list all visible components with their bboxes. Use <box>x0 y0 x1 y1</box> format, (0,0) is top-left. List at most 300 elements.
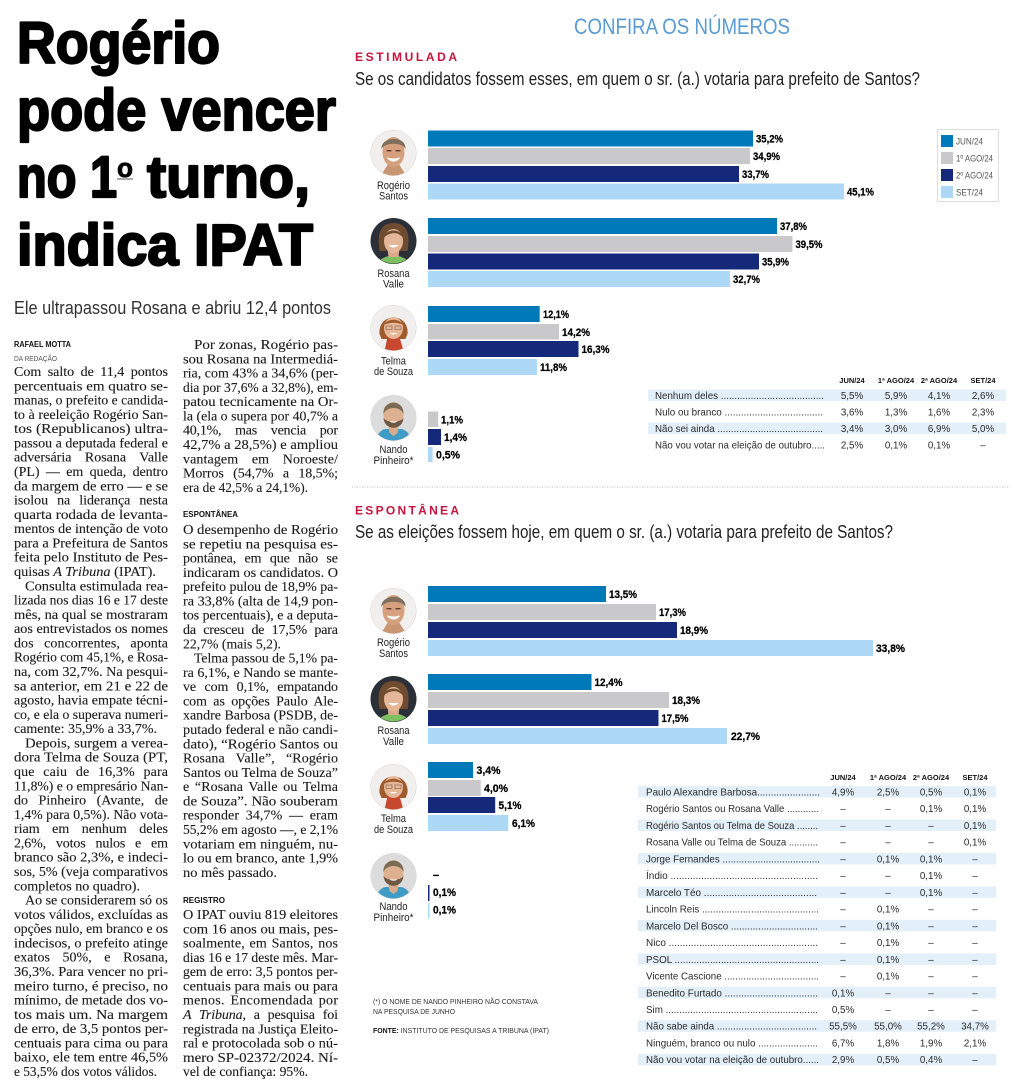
text block: article column 1: de erro, de 3,5 pontos per- <box>14 1022 168 1037</box>
text block: article column 1: baixo, ele tem entre 46,5% <box>14 1051 168 1066</box>
table: stimulated other answers: 2,6% <box>972 391 994 402</box>
candidate: Telma de Souza: 14,2% <box>562 327 590 339</box>
heading: Confira os números: CONFIRA OS NÚMEROS <box>574 14 790 39</box>
table: stimulated other answers: Nulo ou branco .................................... <box>655 406 823 418</box>
table: spontaneous other answers: – <box>972 955 978 966</box>
table: spontaneous other answers: Rogério Santos ou Telma de Souza ........ <box>646 820 818 832</box>
table: spontaneous other answers: Jorge Fernandes .................................... <box>646 853 820 865</box>
text block: article column 1: mínimo, de metade dos vo- <box>14 994 168 1009</box>
candidate: Nando Pinheiro: Pinheiro* <box>374 912 414 924</box>
text block: article column 1: 1,4% para 0,5%). Não vota- <box>14 808 168 823</box>
table: spontaneous other answers: JUN/24 <box>830 773 857 782</box>
table: spontaneous other answers: – <box>840 972 846 983</box>
table: spontaneous other answers: – <box>885 804 891 815</box>
table: spontaneous other answers: 0,5% <box>920 788 942 798</box>
candidate: Rosana Valle: Rosana <box>378 725 410 737</box>
candidate: Rosana Valle: 17,5% <box>662 713 689 725</box>
footnote <box>373 997 549 1035</box>
footnote: (*) O NOME DE NANDO PINHEIRO NÃO CONSTAVA <box>373 997 539 1006</box>
text block: article column 2 part 2: Santos ou Telma de Souza” <box>183 766 338 781</box>
legend: JUN/24 <box>956 136 983 148</box>
table: spontaneous other answers: 2,5% <box>877 788 899 798</box>
text block: article column 2 part 1: Por zonas, Rogério pas- <box>194 338 338 353</box>
text block: article column 1: Rogério com 45,1%, e Rosa- <box>14 651 168 666</box>
table: spontaneous other answers: 0,1% <box>920 888 942 899</box>
text block: article column 2 part 2: ra 33,8% (alta de 14,9 pon- <box>183 594 338 610</box>
text block: article column 1: Com salto de 11,4 pontos <box>14 365 168 380</box>
table: stimulated other answers: SET/24 <box>970 376 996 385</box>
candidate: Nando Pinheiro <box>370 395 467 467</box>
table: spontaneous other answers: Marcelo Del Bosco ................................ <box>646 920 818 932</box>
text block: article column 1: manas, o prefeito e candida- <box>14 394 168 409</box>
text block: article column 1: isolou na liderança nesta <box>14 494 169 509</box>
table: spontaneous other answers: Benedito Furtado .................................. <box>646 987 818 999</box>
table: spontaneous other answers: Rogério Santos ou Rosana Valle ............ <box>646 803 819 815</box>
table: spontaneous other answers: 0,4% <box>920 1055 942 1066</box>
text block: article column 1: dos concorrentes, aponta <box>14 636 169 652</box>
text block: article column 2 part 3: O IPAT ouviu 819 eleitores <box>183 908 338 923</box>
text block: article column 2 part 3: menos. Encomendada por <box>183 994 338 1009</box>
candidate: Telma de Souza <box>370 305 610 378</box>
question: Espontânea: Se as eleições fossem hoje, em quem o sr. (a.) votaria para prefeito de Santos? <box>355 522 893 542</box>
table: spontaneous other answers <box>638 773 996 1066</box>
table: spontaneous other answers: – <box>972 871 978 882</box>
table: spontaneous other answers: 1,8% <box>877 1038 899 1050</box>
headline: o <box>117 153 133 183</box>
text block: article column 1: para a Prefeitura de Santos <box>14 536 168 552</box>
text block: article column 1: Depois, surgem a verea- <box>25 736 168 752</box>
table: spontaneous other answers: – <box>885 838 891 849</box>
text block: article column 2 part 2: da cresceu de 17,5% para <box>183 623 339 638</box>
candidate: Nando Pinheiro: 1,4% <box>444 432 467 444</box>
text block: article column 2 part 2: responder 34,7% — eram <box>183 809 338 824</box>
section label: ESPONTÂNEA: ESPONTÂNEA <box>183 510 238 519</box>
text block: article column 2 part 2: se repetiu na pesquisa es- <box>183 537 338 552</box>
table: spontaneous other answers: 2,9% <box>832 1055 854 1066</box>
text block: article column 2 part 3: centuais para mais ou para <box>183 980 339 994</box>
candidate: Rosana Valle <box>370 218 823 290</box>
candidate: Rogério Santos: 33,7% <box>742 169 769 181</box>
text block: article column 2 part 2: Rosana Valle”, “Rogério <box>183 752 338 767</box>
text block: article column 2 part 2: e “Rosana Valle ou Telma <box>183 780 339 795</box>
text block: article column 1: 2,6%, votos nulos e em <box>14 836 168 852</box>
candidate: Rosana Valle <box>370 674 760 748</box>
text block: article column 2 part 1: era de 42,5% a 24,1%). <box>183 481 308 496</box>
text block: article column 1: feita pelo Instituto de Pes- <box>14 551 168 566</box>
section heading: Espontânea: ESPONTÂNEA <box>355 502 459 518</box>
candidate: Telma de Souza: 11,8% <box>540 362 567 374</box>
table: spontaneous other answers: – <box>840 921 846 932</box>
table: spontaneous other answers: PSOL ..................................................... <box>646 954 819 966</box>
text block: article column 1: dora Telma de Souza (PT, <box>14 751 168 766</box>
text block: article column 1: 36,3%. Para vencer no pri- <box>14 965 168 980</box>
table: spontaneous other answers: – <box>840 821 846 832</box>
table: spontaneous other answers: – <box>840 938 846 949</box>
table: spontaneous other answers: – <box>928 905 934 916</box>
candidate: Rogério Santos: 45,1% <box>847 186 874 198</box>
table: spontaneous other answers: 0,1% <box>964 838 986 849</box>
table: spontaneous other answers: Sim ........................................................ <box>646 1004 818 1016</box>
text block: article column 2 part 2: dato), “Rogério Santos ou <box>183 737 338 752</box>
table: spontaneous other answers: 0,5% <box>877 1055 899 1066</box>
candidate: Rosana Valle: 35,9% <box>762 256 789 268</box>
text block: article column 1: to à reeleição Rogério San- <box>14 408 168 423</box>
table: spontaneous other answers: – <box>840 871 846 882</box>
question: Estimulada: Se os candidatos fossem esses, em quem o sr. (a.) votaria para prefeito de Santos? <box>355 69 920 89</box>
candidate: Rogério Santos: Rogério <box>377 637 410 649</box>
table: stimulated other answers: Não sei ainda ....................................... <box>655 423 823 435</box>
text block: article column 1: branco são 2,3%, e indeci- <box>14 851 168 866</box>
text block: article column 2 part 1: 42,7% a 28,5%) e ampliou <box>183 438 338 453</box>
table: spontaneous other answers: – <box>840 804 846 815</box>
table: spontaneous other answers: 4,9% <box>832 788 854 798</box>
table: spontaneous other answers: – <box>972 938 978 949</box>
table: spontaneous other answers: 0,1% <box>964 821 986 832</box>
candidate: Rogério Santos: Santos <box>379 190 408 202</box>
table: stimulated other answers: 1ª AGO/24 <box>878 376 915 385</box>
candidate: Rogério Santos: 13,5% <box>609 589 637 601</box>
table: spontaneous other answers: 0,1% <box>877 972 899 983</box>
table: spontaneous other answers: 0,1% <box>832 988 854 999</box>
table: stimulated other answers: Nenhum deles ...................................... <box>655 390 824 402</box>
table: stimulated other answers: 0,1% <box>885 440 907 452</box>
footnote: FONTE: INSTITUTO DE PESQUISAS A TRIBUNA (IPAT) <box>373 1026 549 1035</box>
table: stimulated other answers: 2,5% <box>841 440 863 452</box>
table: spontaneous other answers: 0,5% <box>832 1005 854 1016</box>
table: spontaneous other answers: – <box>972 1005 978 1016</box>
candidate: Rosana Valle: 12,4% <box>594 677 623 689</box>
table: stimulated other answers: 3,6% <box>841 408 863 418</box>
table: stimulated other answers: 5,5% <box>841 391 863 402</box>
candidate: Telma de Souza: Telma <box>381 813 407 825</box>
candidate: Nando Pinheiro: Nando <box>380 901 408 913</box>
text block: article column 2 part 3: gem de erro: 3,5 pontos per- <box>183 965 338 980</box>
table: spontaneous other answers: – <box>885 1005 891 1016</box>
candidate: Nando Pinheiro: Pinheiro* <box>374 455 414 467</box>
legend: SET/24 <box>956 188 983 198</box>
candidate: Rogério Santos: 17,3% <box>659 607 686 619</box>
candidate: Rosana Valle: 18,3% <box>672 695 700 707</box>
table: spontaneous other answers: – <box>840 888 846 899</box>
table: stimulated other answers: – <box>980 440 986 452</box>
table: spontaneous other answers: Nico ...................................................... <box>646 937 818 949</box>
text block: article column 1: riam em nenhum deles <box>14 822 168 837</box>
candidate: Rogério Santos: 35,2% <box>756 134 783 146</box>
table: spontaneous other answers: 0,1% <box>964 788 986 798</box>
table: spontaneous other answers: Índio ..................................................... <box>646 869 818 882</box>
text block: article column 2 part 2: xandre Barbosa (PSDB, de- <box>183 709 338 724</box>
text block: article column 1: e 53,5% dos votos válidos. <box>14 1065 157 1080</box>
text block: article column 1: completos no quadro). <box>14 879 140 894</box>
table: spontaneous other answers: 55,2% <box>917 1022 945 1033</box>
headline: no 1 <box>17 145 117 210</box>
text block: article column 1: mês, na qual se mostraram <box>14 608 168 623</box>
text block: article column 2 part 1 <box>183 338 339 496</box>
candidate: Nando Pinheiro: Nando <box>380 444 408 456</box>
candidate: Rosana Valle: Valle <box>383 736 404 748</box>
table: spontaneous other answers: Lincoln Reis ........................................... <box>646 904 819 916</box>
text block: article column 2 part 2: de Souza”. Não souberam <box>183 794 338 810</box>
table: spontaneous other answers: 0,1% <box>877 905 899 916</box>
table: spontaneous other answers: 0,1% <box>877 938 899 949</box>
text block: article column 1: 11,8%) e o empresário Nan- <box>14 779 168 794</box>
table: spontaneous other answers: – <box>928 821 934 832</box>
table: spontaneous other answers: Não vou votar na eleição de outubro...... <box>646 1054 819 1066</box>
table: spontaneous other answers: 1ª AGO/24 <box>870 773 907 782</box>
text block: article column 2 part 2: com as opções Paulo Ale- <box>183 694 338 710</box>
table: spontaneous other answers: Marcelo Téo ......................................... <box>646 887 817 899</box>
table: stimulated other answers: 5,9% <box>885 391 907 402</box>
candidate: Rogério Santos <box>370 586 905 660</box>
text block: article column 1: meiro turno, é preciso, no <box>14 979 168 994</box>
text block: article column 2 part 2: O desempenho de Rogério <box>183 523 338 538</box>
headline: turno, <box>147 145 310 210</box>
legend: 1º AGO/24 <box>956 154 993 164</box>
text block: article column 2 part 1: sou Rosana na Intermediá- <box>183 352 338 367</box>
table: spontaneous other answers: Vicente Cascione ................................... <box>646 971 819 983</box>
candidate: Telma de Souza: de Souza <box>374 366 414 378</box>
table: spontaneous other answers: 2,1% <box>964 1038 986 1050</box>
table: spontaneous other answers: 0,1% <box>877 955 899 966</box>
candidate: Nando Pinheiro <box>370 853 456 924</box>
text block: article column 1: opções nulo, em branco e os <box>14 922 168 937</box>
text block: article column 1: sos, 5% (veja comparativos <box>14 865 168 880</box>
candidate: Rogério Santos: 34,9% <box>753 151 780 163</box>
candidate: Telma de Souza: 3,4% <box>476 765 501 777</box>
candidate: Telma de Souza: 12,1% <box>543 309 569 321</box>
candidate: Rosana Valle: 32,7% <box>733 274 760 286</box>
candidate: Rosana Valle: 39,5% <box>796 239 823 251</box>
table: spontaneous other answers: 6,7% <box>832 1038 854 1050</box>
table: spontaneous other answers: Não sabe ainda ..................................... <box>646 1021 817 1033</box>
table: spontaneous other answers: – <box>928 972 934 983</box>
table: stimulated other answers: JUN/24 <box>839 376 866 385</box>
table: spontaneous other answers: – <box>885 888 891 899</box>
candidate: Rosana Valle: 22,7% <box>731 731 760 743</box>
candidate: Rogério Santos: Santos <box>379 648 408 660</box>
text block: article column 2 part 3 <box>182 908 339 1080</box>
text block: article column 1: tos (Republicanos) ultra- <box>14 422 168 437</box>
byline: RAFAEL MOTTA <box>14 340 71 349</box>
table: stimulated other answers: 2ª AGO/24 <box>921 376 958 385</box>
table: spontaneous other answers: – <box>885 988 891 999</box>
table: stimulated other answers: 2,3% <box>972 408 994 418</box>
text block: article column 1: passou a deputada federal e <box>14 436 168 452</box>
section heading: Estimulada: ESTIMULADA <box>355 50 457 64</box>
candidate: Rogério Santos <box>370 130 874 202</box>
text block: article column 1: votos válidos, excluídas as <box>14 908 168 923</box>
text block: article column 1: co, e ela o superava numeri- <box>14 708 168 723</box>
table: stimulated other answers: 1,3% <box>885 408 907 418</box>
table: stimulated other answers: 0,1% <box>928 440 950 452</box>
text block: article column 1: indecisos, o prefeito atinge <box>14 936 168 952</box>
table: spontaneous other answers: – <box>972 854 978 865</box>
table: spontaneous other answers: 1,9% <box>920 1038 942 1050</box>
section label: REGISTRO: REGISTRO <box>183 896 225 905</box>
text block: article column 2 part 2: pontânea, em que não se <box>183 552 338 567</box>
text block: article column 1: camente: 35,9% a 33,7%. <box>14 722 157 737</box>
table: spontaneous other answers: – <box>928 921 934 932</box>
byline: DA REDAÇÃO <box>14 354 57 363</box>
table: stimulated other answers: 6,9% <box>928 424 950 435</box>
table: spontaneous other answers: SET/24 <box>962 773 988 782</box>
table: spontaneous other answers: – <box>928 988 934 999</box>
text block: article column 2 part 2: prefeito pulou de 18,9% pa- <box>183 580 338 595</box>
text block: article column 1: na, com 32,7%. Na pesqui- <box>14 665 168 680</box>
text block: article column 2 part 2: 22,7% (mais 5,2). <box>183 637 281 652</box>
text block: article column 2 part 1: la (ela o supera por 40,7% a <box>183 410 339 424</box>
table: spontaneous other answers: – <box>972 1055 978 1066</box>
table: spontaneous other answers: 0,1% <box>920 871 942 882</box>
headline <box>17 11 336 278</box>
table: spontaneous other answers: 55,5% <box>829 1022 857 1033</box>
table: spontaneous other answers: – <box>928 938 934 949</box>
text block: article column 1: da margem de erro — e se <box>14 479 168 494</box>
table: spontaneous other answers: – <box>885 871 891 882</box>
candidate: Rosana Valle: Valle <box>383 278 404 290</box>
table: spontaneous other answers: – <box>928 955 934 966</box>
table: stimulated other answers <box>648 376 1006 452</box>
candidate: Rogério Santos: Rogério <box>377 180 410 192</box>
text block: article column 1: Ao se considerarem só os <box>25 894 168 909</box>
table: spontaneous other answers: – <box>840 955 846 966</box>
text block: article column 2 part 2: ra 6,1%, e Nando se mante- <box>183 666 338 681</box>
text block: article column 2 part 2: no mês passado. <box>183 866 277 881</box>
text block: article column 2 part 2: 55,2% em agosto —, e 2,1% <box>183 823 338 838</box>
table: stimulated other answers: 3,4% <box>841 424 863 435</box>
candidate: Telma de Souza: 4,0% <box>484 783 508 795</box>
candidate: Rogério Santos: 18,9% <box>680 625 708 637</box>
table: spontaneous other answers: 0,1% <box>877 921 899 932</box>
table: spontaneous other answers: Rosana Valle ou Telma de Souza ........... <box>646 837 818 849</box>
table: spontaneous other answers: – <box>972 921 978 932</box>
legend: 2º AGO/24 <box>956 170 993 182</box>
candidate: Telma de Souza: 16,3% <box>582 344 610 356</box>
text block: article column 1: percentuais em quatro se- <box>14 379 168 394</box>
text block: article column 1: (PL) — em queda, dentro <box>14 465 168 480</box>
text block: article column 2 part 2 <box>183 523 339 881</box>
table: spontaneous other answers: – <box>840 854 846 865</box>
table: stimulated other answers: Não vou votar na eleição de outubro..... <box>655 440 825 452</box>
text block: article column 1: quisas A Tribuna (IPAT). <box>14 565 156 580</box>
text block: article column 1: aos entrevistados os nomes <box>14 622 168 637</box>
table: spontaneous other answers: 0,1% <box>877 854 899 865</box>
text block: article column 2 part 3: dias 16 e 17 deste mês. Mar- <box>183 951 338 966</box>
text block: article column 2 part 3: mero SP-02372/2024. Ní- <box>183 1051 338 1066</box>
headline: Rogério <box>17 11 220 76</box>
table: spontaneous other answers: – <box>885 821 891 832</box>
text block: article column 2 part 2: votariam em ninguém, nu- <box>183 837 338 852</box>
candidate: Nando Pinheiro: – <box>433 870 439 882</box>
text block: article column 2 part 3: registrada na Justiça Eleito- <box>183 1022 338 1037</box>
text block: article column 2 part 3: ral e protocolada sob o nú- <box>183 1037 338 1052</box>
candidate: Telma de Souza: Telma <box>381 356 407 368</box>
candidate: Telma de Souza: 6,1% <box>512 818 535 830</box>
table: stimulated other answers: 1,6% <box>928 408 950 418</box>
candidate: Nando Pinheiro: 0,1% <box>433 887 456 899</box>
table: spontaneous other answers: 34,7% <box>961 1022 989 1033</box>
text block: article column 1: adversária Rosana Valle <box>14 451 168 466</box>
candidate: Telma de Souza <box>370 762 535 836</box>
text block: article column 2 part 3: A Tribuna, a pesquisa foi <box>182 1008 338 1023</box>
byline <box>14 340 71 363</box>
table: spontaneous other answers: 0,1% <box>920 854 942 865</box>
text block: article column 2 part 3: soalmente, em Santos, nos <box>183 937 338 952</box>
candidate: Nando Pinheiro: 1,1% <box>441 414 463 426</box>
table: stimulated other answers: 3,0% <box>885 424 907 435</box>
text block: article column 1: Consulta estimulada rea- <box>25 579 168 594</box>
table: spontaneous other answers: – <box>972 905 978 916</box>
text block: article column 2 part 2: tos percentuais), e a deputa- <box>183 609 338 624</box>
text block: article column 2 part 1: ria, com 43% a 34,6% (per- <box>183 367 338 382</box>
candidate: Nando Pinheiro: 0,5% <box>436 450 460 462</box>
text block: article column 2 part 2: lo ou em branco, ante 1,9% <box>183 852 338 867</box>
candidate: Telma de Souza: de Souza <box>374 824 414 836</box>
text block: article column 1: agosto, havia empate técni- <box>14 694 168 709</box>
text block: article column 2 part 1: patou tecnicamente na Or- <box>183 395 338 410</box>
text block: article column 2 part 2: putado federal e não candi- <box>183 723 338 738</box>
text block: article column 1: centuais para cima ou para <box>14 1036 169 1052</box>
candidate: Nando Pinheiro: 0,1% <box>433 904 456 916</box>
text block: article column 1: quarta rodada de levanta- <box>14 508 168 523</box>
text block: article column 2 part 1: 40,1%, mas vencia por <box>183 424 338 439</box>
candidate: Rosana Valle: Rosana <box>378 268 410 280</box>
panel: stimulated bar chart <box>370 130 874 467</box>
text block: article column 2 part 1: vantagem em Noroeste/ <box>183 452 338 467</box>
table: spontaneous other answers: Paulo Alexandre Barbosa....................... <box>646 786 820 798</box>
panel: spontaneous bar chart <box>370 586 905 924</box>
candidate: Rosana Valle: 37,8% <box>780 221 807 233</box>
table: spontaneous other answers: 55,0% <box>874 1022 902 1033</box>
table: stimulated other answers: 4,1% <box>928 391 950 402</box>
text block: article column 1: lizada nos dias 16 e 17 deste <box>14 594 168 609</box>
table: spontaneous other answers: 0,1% <box>920 804 942 815</box>
text block: article column 2 part 1: dia por 37,6% a 32,8%), em- <box>183 381 338 396</box>
footnote: NA PESQUISA DE JUNHO <box>373 1007 455 1016</box>
table: spontaneous other answers: 2ª AGO/24 <box>913 773 950 782</box>
headline: indica IPAT <box>17 213 313 278</box>
table: spontaneous other answers: – <box>928 1005 934 1016</box>
table: spontaneous other answers: Ninguém, branco ou nulo ...................... <box>646 1038 818 1050</box>
table: spontaneous other answers: – <box>840 905 846 916</box>
table: stimulated other answers: 5,0% <box>972 424 994 435</box>
text block: article column 1: mentos de intenção de voto <box>14 522 168 537</box>
text block: article column 1: tos mais um. Na margem <box>14 1008 168 1023</box>
text block: article column 1: sa anterior, em 21 e 22 de <box>14 679 168 694</box>
table: spontaneous other answers: – <box>840 838 846 849</box>
candidate: Rogério Santos: 33,8% <box>876 643 905 655</box>
table: spontaneous other answers: – <box>928 838 934 849</box>
text block: article column 2 part 3: vel de confiança: 95%. <box>183 1065 308 1080</box>
text block: article column 2 part 2: Telma passou de 5,1% pa- <box>194 652 338 667</box>
subheading: Ele ultrapassou Rosana e abriu 12,4 pontos <box>14 297 331 318</box>
table: spontaneous other answers: 0,1% <box>964 804 986 815</box>
text block: article column 1: exatos 50%, e Rosana, <box>14 951 168 966</box>
table: spontaneous other answers: – <box>972 988 978 999</box>
table: spontaneous other answers: – <box>972 972 978 983</box>
text block: article column 1 <box>14 365 169 1080</box>
candidate: Telma de Souza: 5,1% <box>498 800 522 812</box>
table: spontaneous other answers: – <box>972 888 978 899</box>
text block: article column 2 part 1: Morros (54,7% a 18,5%; <box>183 467 338 482</box>
text block: article column 1: que caiu de 16,3% para <box>14 765 169 780</box>
headline: pode vencer <box>17 78 336 143</box>
text block: article column 2 part 3: com 16 anos ou mais, pes- <box>183 922 338 937</box>
text block: article column 1: do Pinheiro (Avante, de <box>14 794 168 809</box>
text block: article column 2 part 2: indicaram os candidatos. O <box>183 566 338 581</box>
legend <box>938 130 998 202</box>
text block: article column 2 part 2: ve com 0,1%, empatando <box>183 680 338 695</box>
